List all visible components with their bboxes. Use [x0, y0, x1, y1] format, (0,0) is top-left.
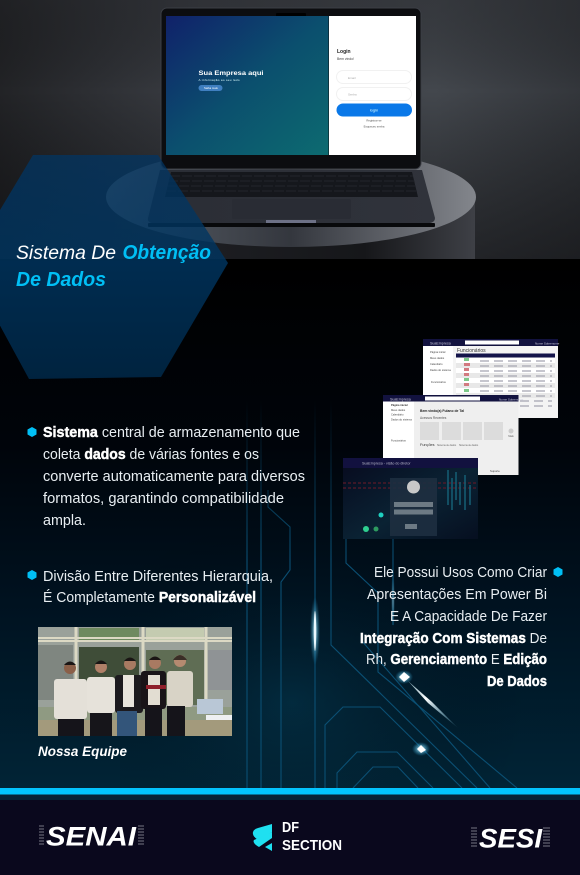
screenshot: login with data background: SuaEmpresa - visão do diretor	[362, 462, 411, 466]
background: circuit lines	[247, 400, 517, 788]
person 1	[54, 662, 87, 736]
system screenshots	[343, 339, 560, 539]
screenshot: profile dashboard: Funções	[420, 443, 435, 447]
screenshot: profile dashboard	[383, 395, 524, 475]
login screen left: A informação ao seu lado	[198, 78, 240, 82]
laptop base	[148, 170, 435, 223]
screenshot: employee table: Meus dados	[430, 356, 445, 360]
keyboard	[165, 172, 418, 197]
text block: central system: converte automaticamente para diversos	[43, 469, 305, 485]
login screen right: Bem vindo!	[337, 57, 354, 61]
pedestal	[106, 147, 476, 259]
screenshot: profile dashboard: SuaEmpresa	[390, 398, 411, 402]
team photo	[38, 627, 232, 736]
login screen right: Login	[337, 49, 351, 55]
screenshot: profile dashboard: Dados do sistema	[391, 418, 412, 422]
text block: central system: Sistema central de armazenamento que	[43, 425, 300, 441]
bullet	[28, 427, 36, 437]
screenshot: profile dashboard: Sistema de dados	[437, 444, 457, 447]
screenshot: employee table: Funcionários	[457, 348, 486, 354]
login screen left: Saiba mais	[204, 86, 218, 90]
person 3	[115, 658, 143, 736]
laptop lid	[161, 8, 421, 169]
screenshot: profile dashboard: Acessos Recentes	[420, 416, 447, 420]
login screen right: Registrar-se	[366, 118, 382, 122]
screenshot: profile dashboard: Bem vindo(a) Fulano de Tal	[420, 409, 464, 413]
text block: uses: Rh, Gerenciamento E Edição	[366, 652, 547, 668]
title	[16, 242, 211, 291]
screenshot: profile dashboard: Calendário	[391, 412, 404, 416]
caption: team: Nossa Equipe	[38, 743, 127, 759]
screenshot: login with data background	[343, 458, 478, 539]
text block: uses: Ele Possui Usos Como Criar	[374, 565, 547, 581]
screenshot: profile dashboard: Mais	[508, 435, 514, 438]
logo: DF Section: SECTION	[282, 837, 342, 854]
screenshot: profile dashboard: Sistema de dados	[459, 444, 479, 447]
text block: central system: ampla.	[43, 513, 86, 529]
background: lower circuit area	[0, 259, 580, 790]
login screen right: login	[370, 108, 378, 112]
screenshot: profile dashboard: Suporte	[490, 469, 500, 473]
screenshot: profile dashboard: Nome Sobrenome	[499, 398, 524, 402]
text block: uses: Apresentações Em Power Bi	[367, 587, 547, 603]
table with boxes	[197, 699, 232, 720]
top photo backdrop	[0, 0, 580, 259]
logo: DF Section: DF	[282, 819, 299, 836]
screenshot: profile dashboard: Funcionários	[391, 438, 407, 442]
title: Obtenção	[122, 242, 211, 264]
title: Sistema De	[16, 242, 116, 264]
text block: central system: formatos, garantindo compatibilidade	[43, 491, 284, 507]
logo: SENAI: SENAI	[46, 822, 137, 852]
login screen left: Sua Empresa aqui	[198, 70, 264, 77]
text block: central system	[28, 425, 305, 529]
laptop	[148, 8, 435, 227]
login screen left	[166, 16, 328, 155]
screenshot: employee table: SuaEmpresa	[430, 342, 451, 346]
text block: uses: Integração Com Sistemas De	[360, 631, 547, 647]
title: De Dados	[16, 269, 106, 291]
person 4	[141, 656, 166, 736]
screenshot: profile dashboard: Meus dados	[391, 408, 406, 412]
screenshot: employee table: Página inicial	[430, 350, 446, 354]
screenshot: employee table: Dados do sistema	[430, 368, 451, 372]
text block: hierarchy	[28, 569, 273, 606]
text block: uses	[360, 565, 562, 690]
person 5	[167, 655, 193, 736]
footer band	[0, 788, 580, 875]
light flares	[310, 572, 458, 756]
notch	[276, 13, 306, 18]
icon	[253, 824, 272, 851]
text block: hierarchy: Divisão Entre Diferentes Hierarquia,	[43, 569, 273, 585]
title hexagon panel	[0, 155, 228, 379]
text block: uses: De Dados	[487, 674, 547, 690]
text block: uses: E A Capacidade De Fazer	[390, 609, 547, 625]
text block: central system: coleta dados de várias fontes e os	[43, 447, 259, 463]
logo: DF Section	[253, 819, 342, 854]
logo: SESI: SESI	[479, 824, 543, 854]
login screen right: Email	[348, 76, 356, 80]
bullet	[28, 570, 36, 580]
person 2	[87, 660, 115, 736]
login screen right	[329, 16, 416, 155]
screenshot: employee table: Funcionários	[431, 380, 447, 384]
text block: hierarchy: É Completamente Personalizável	[43, 589, 256, 606]
trackpad	[232, 199, 351, 219]
screenshot: profile dashboard: Página inicial	[391, 403, 408, 407]
screenshot: employee table: Calendário	[430, 362, 443, 366]
login screen right: Senha	[348, 92, 357, 96]
bullet	[554, 567, 562, 577]
screenshot: employee table: Nome Sobrenome	[535, 342, 560, 346]
screenshot: employee table	[423, 339, 560, 418]
login screen right: Esqueceu senha	[364, 124, 385, 128]
